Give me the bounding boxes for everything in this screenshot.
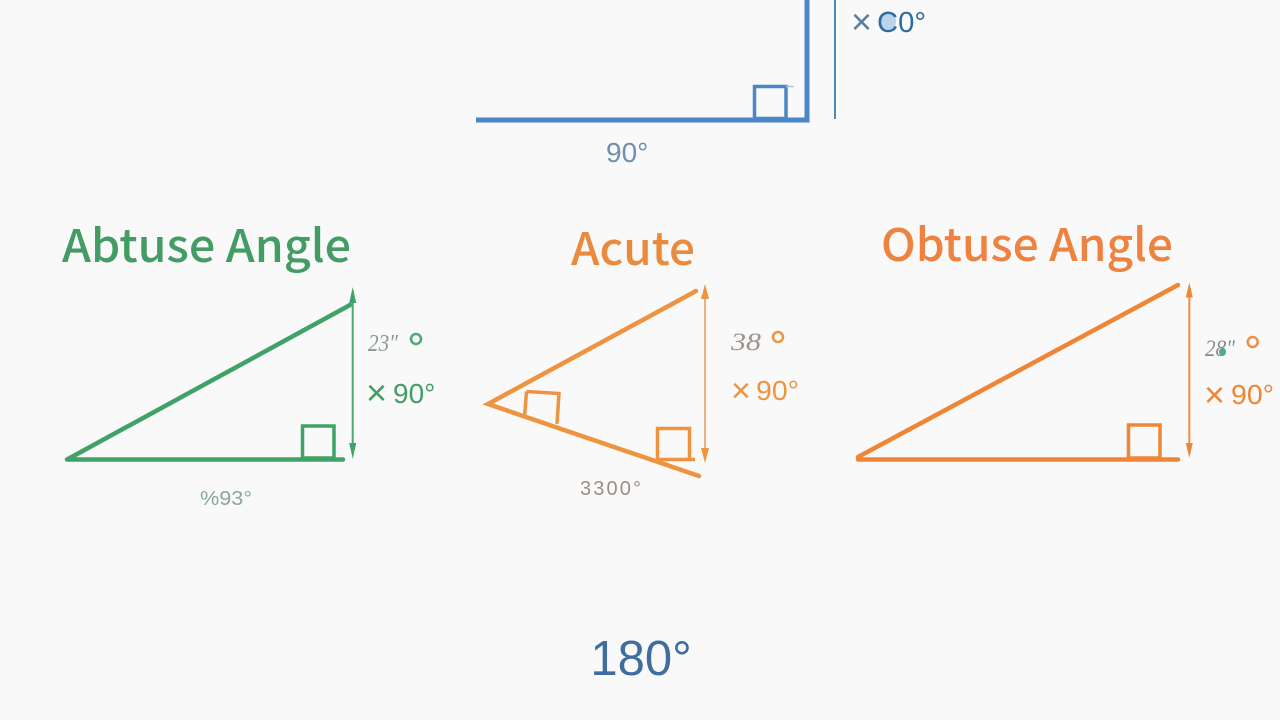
orange acute triangle diagram: 38	[730, 329, 762, 356]
orange acute triangle diagram: 3300°	[580, 478, 641, 500]
blue right angle diagram: 90°	[606, 137, 648, 168]
blue right angle diagram: C0°	[877, 7, 926, 39]
orange obtuse triangle diagram: 90°	[1231, 379, 1274, 410]
green triangle diagram: ×	[366, 372, 387, 413]
orange obtuse triangle diagram: ×	[1204, 374, 1225, 415]
blue right angle diagram: ×	[851, 1, 872, 42]
orange obtuse triangle diagram: 28″	[1205, 336, 1235, 361]
green triangle diagram: %93°	[200, 488, 252, 510]
blue right angle diagram	[476, 0, 926, 168]
green triangle diagram: 90°	[393, 378, 435, 409]
heading: Obtuse Angle: Obtuse Angle	[881, 209, 1173, 274]
orange acute triangle diagram	[488, 284, 799, 500]
total: 180 degrees: 180°	[590, 632, 692, 686]
green triangle diagram: 23″	[368, 331, 399, 357]
heading: Abtuse Angle: Abtuse Angle	[62, 210, 351, 275]
heading: Acute: Acute	[571, 213, 695, 278]
green triangle diagram	[67, 287, 435, 510]
orange acute triangle diagram: 90°	[756, 375, 799, 406]
orange acute triangle diagram: ×	[731, 372, 751, 410]
orange obtuse triangle diagram	[858, 282, 1274, 460]
